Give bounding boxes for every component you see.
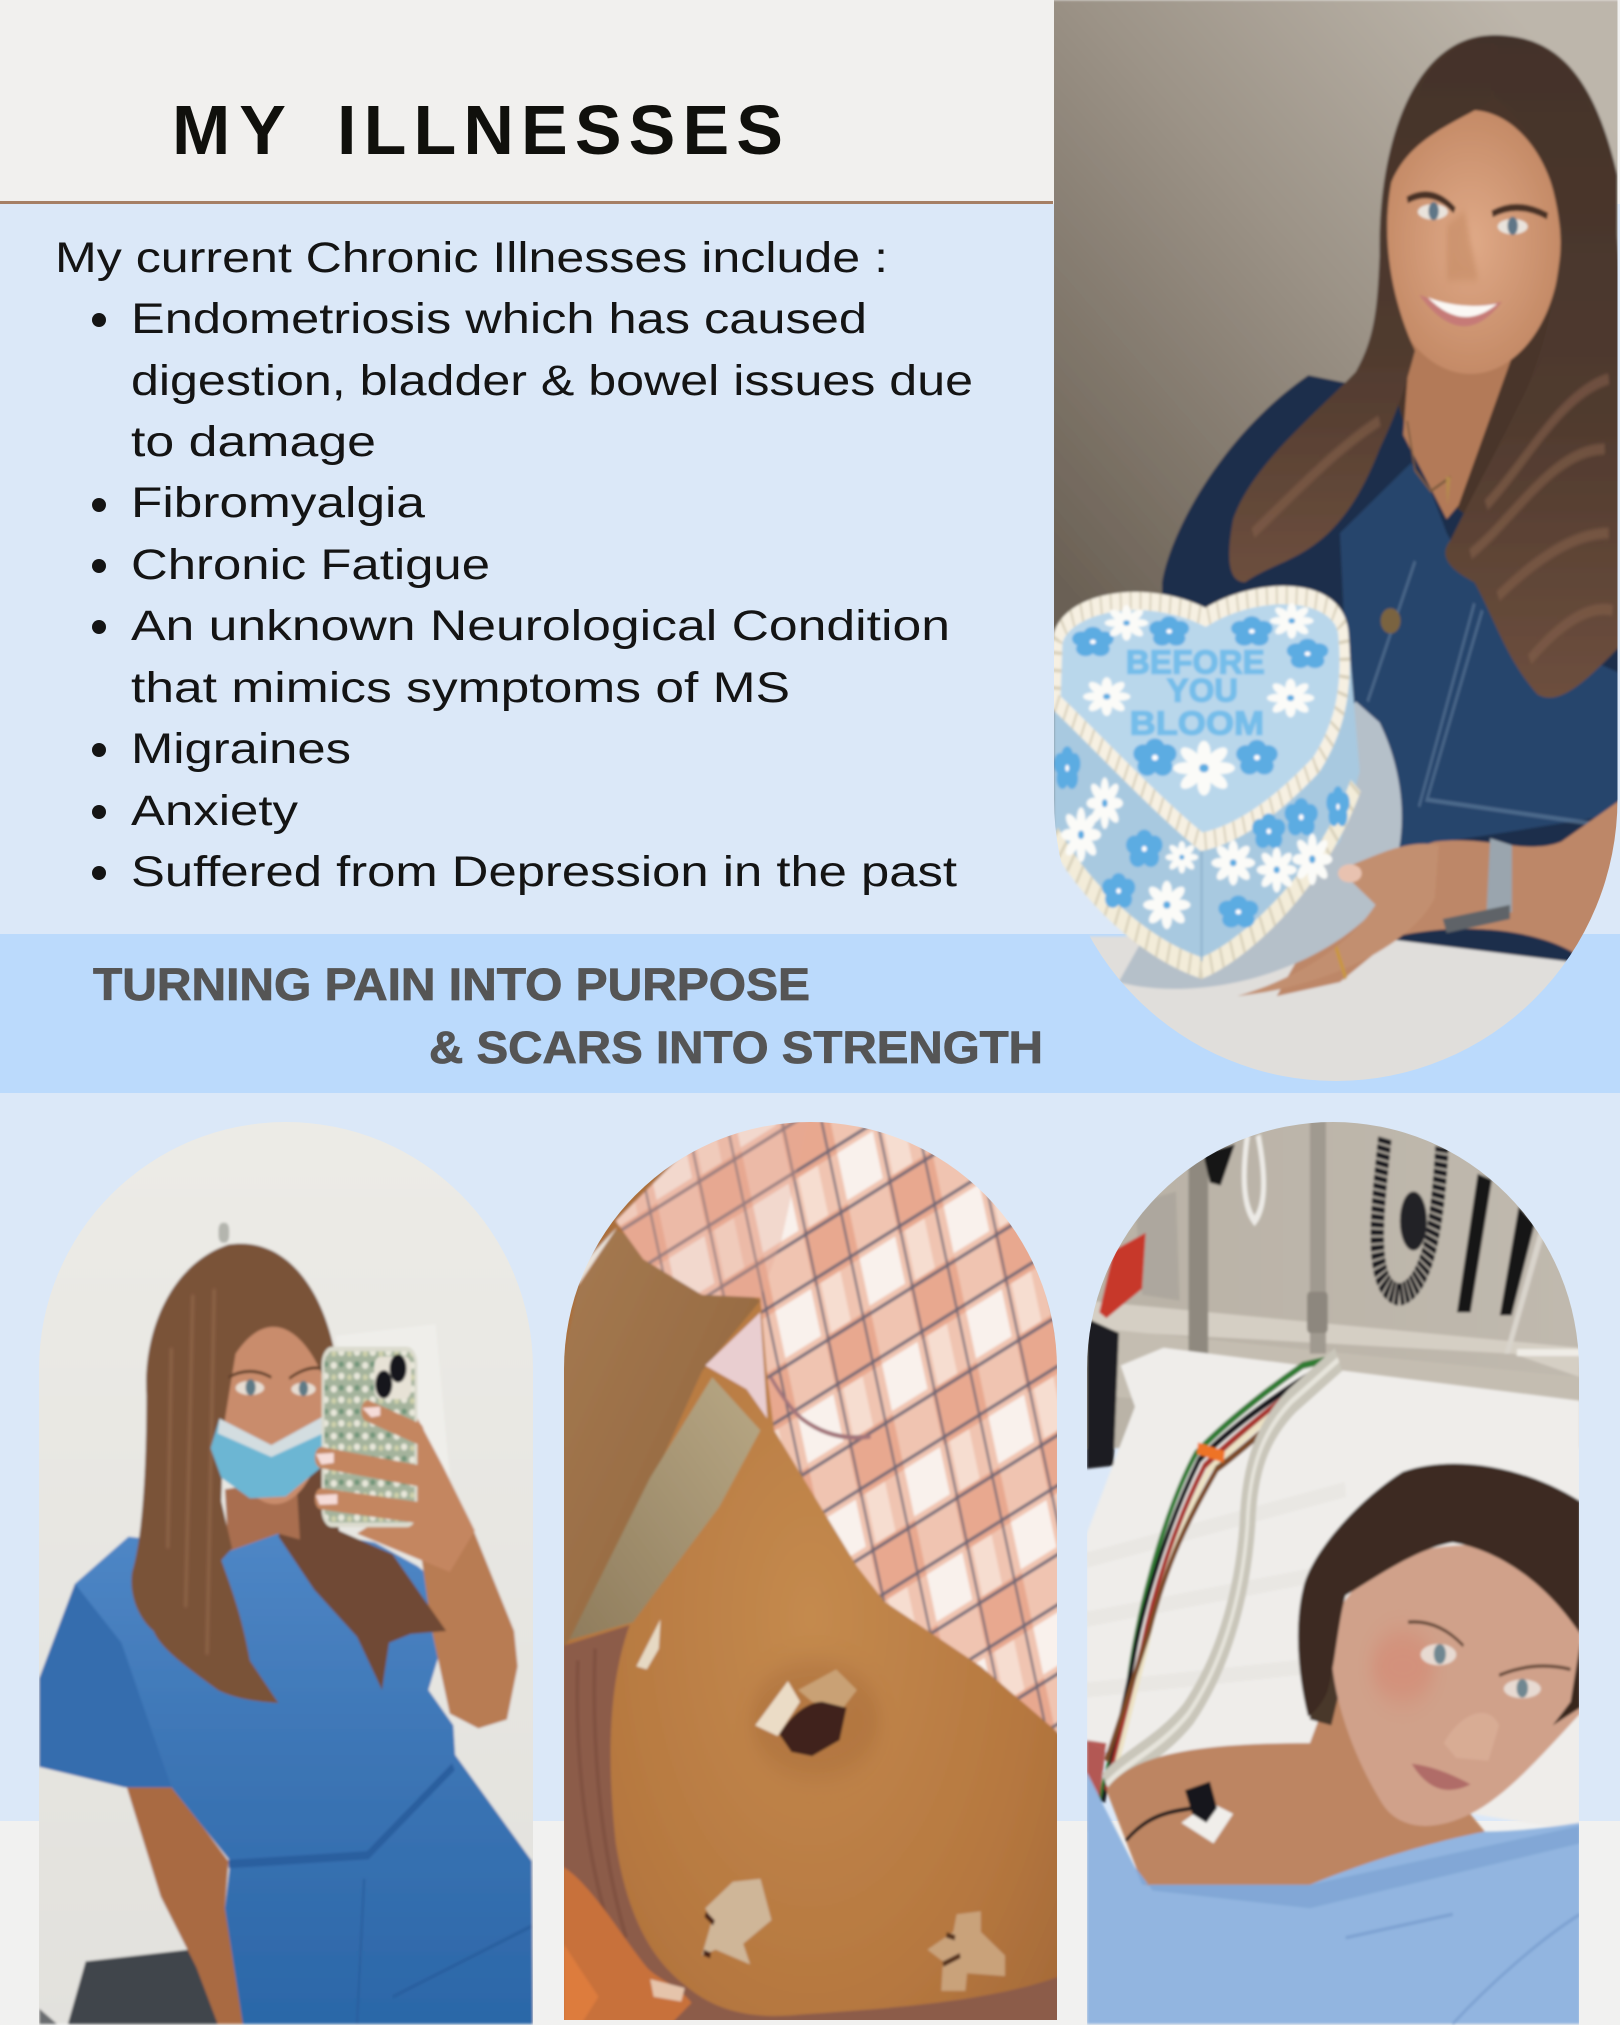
header panel	[0, 0, 1054, 202]
title: ILLNESSES	[337, 91, 783, 169]
text block: chronic illnesses list: Chronic Fatigue	[131, 541, 490, 589]
text block: chronic illnesses list: An unknown Neurological Condition	[131, 602, 950, 650]
banner slogan: TURNING PAIN INTO PURPOSE	[93, 959, 810, 1010]
text block: chronic illnesses list: digestion, bladder & bowel issues due	[131, 357, 973, 405]
photo: woman holding heart cake: BLOOM	[1130, 704, 1264, 742]
banner band	[0, 934, 1620, 1093]
text block: chronic illnesses list: Endometriosis which has caused	[131, 295, 867, 343]
photo: woman holding heart cake: YOU	[1167, 672, 1238, 709]
text block: chronic illnesses list: Migraines	[131, 725, 351, 773]
text block: chronic illnesses list: that mimics symptoms of MS	[131, 664, 790, 712]
text block: chronic illnesses list: Suffered from Depression in the past	[131, 848, 957, 896]
photo: abdomen with surgical wounds	[561, 1118, 1060, 2024]
banner slogan	[93, 959, 1043, 1073]
title: MY	[172, 91, 286, 169]
photo: hospital bed with monitor wires	[1081, 1118, 1585, 2024]
text block: chronic illnesses list: Anxiety	[131, 787, 299, 835]
banner slogan: & SCARS INTO STRENGTH	[429, 1022, 1043, 1073]
text block: chronic illnesses list: My current Chronic Illnesses include :	[55, 234, 888, 282]
text block: chronic illnesses list: Fibromyalgia	[131, 479, 425, 527]
photo: woman holding heart cake: BEFORE	[1126, 643, 1265, 681]
photo: selfie in hospital gown and mask	[36, 1118, 536, 2024]
photo: woman holding heart cake	[1051, 0, 1620, 1084]
header divider	[0, 201, 1053, 204]
panel: illness list background	[0, 204, 1620, 1821]
text block: chronic illnesses list: to damage	[131, 418, 376, 466]
text block: chronic illnesses list	[55, 234, 973, 896]
